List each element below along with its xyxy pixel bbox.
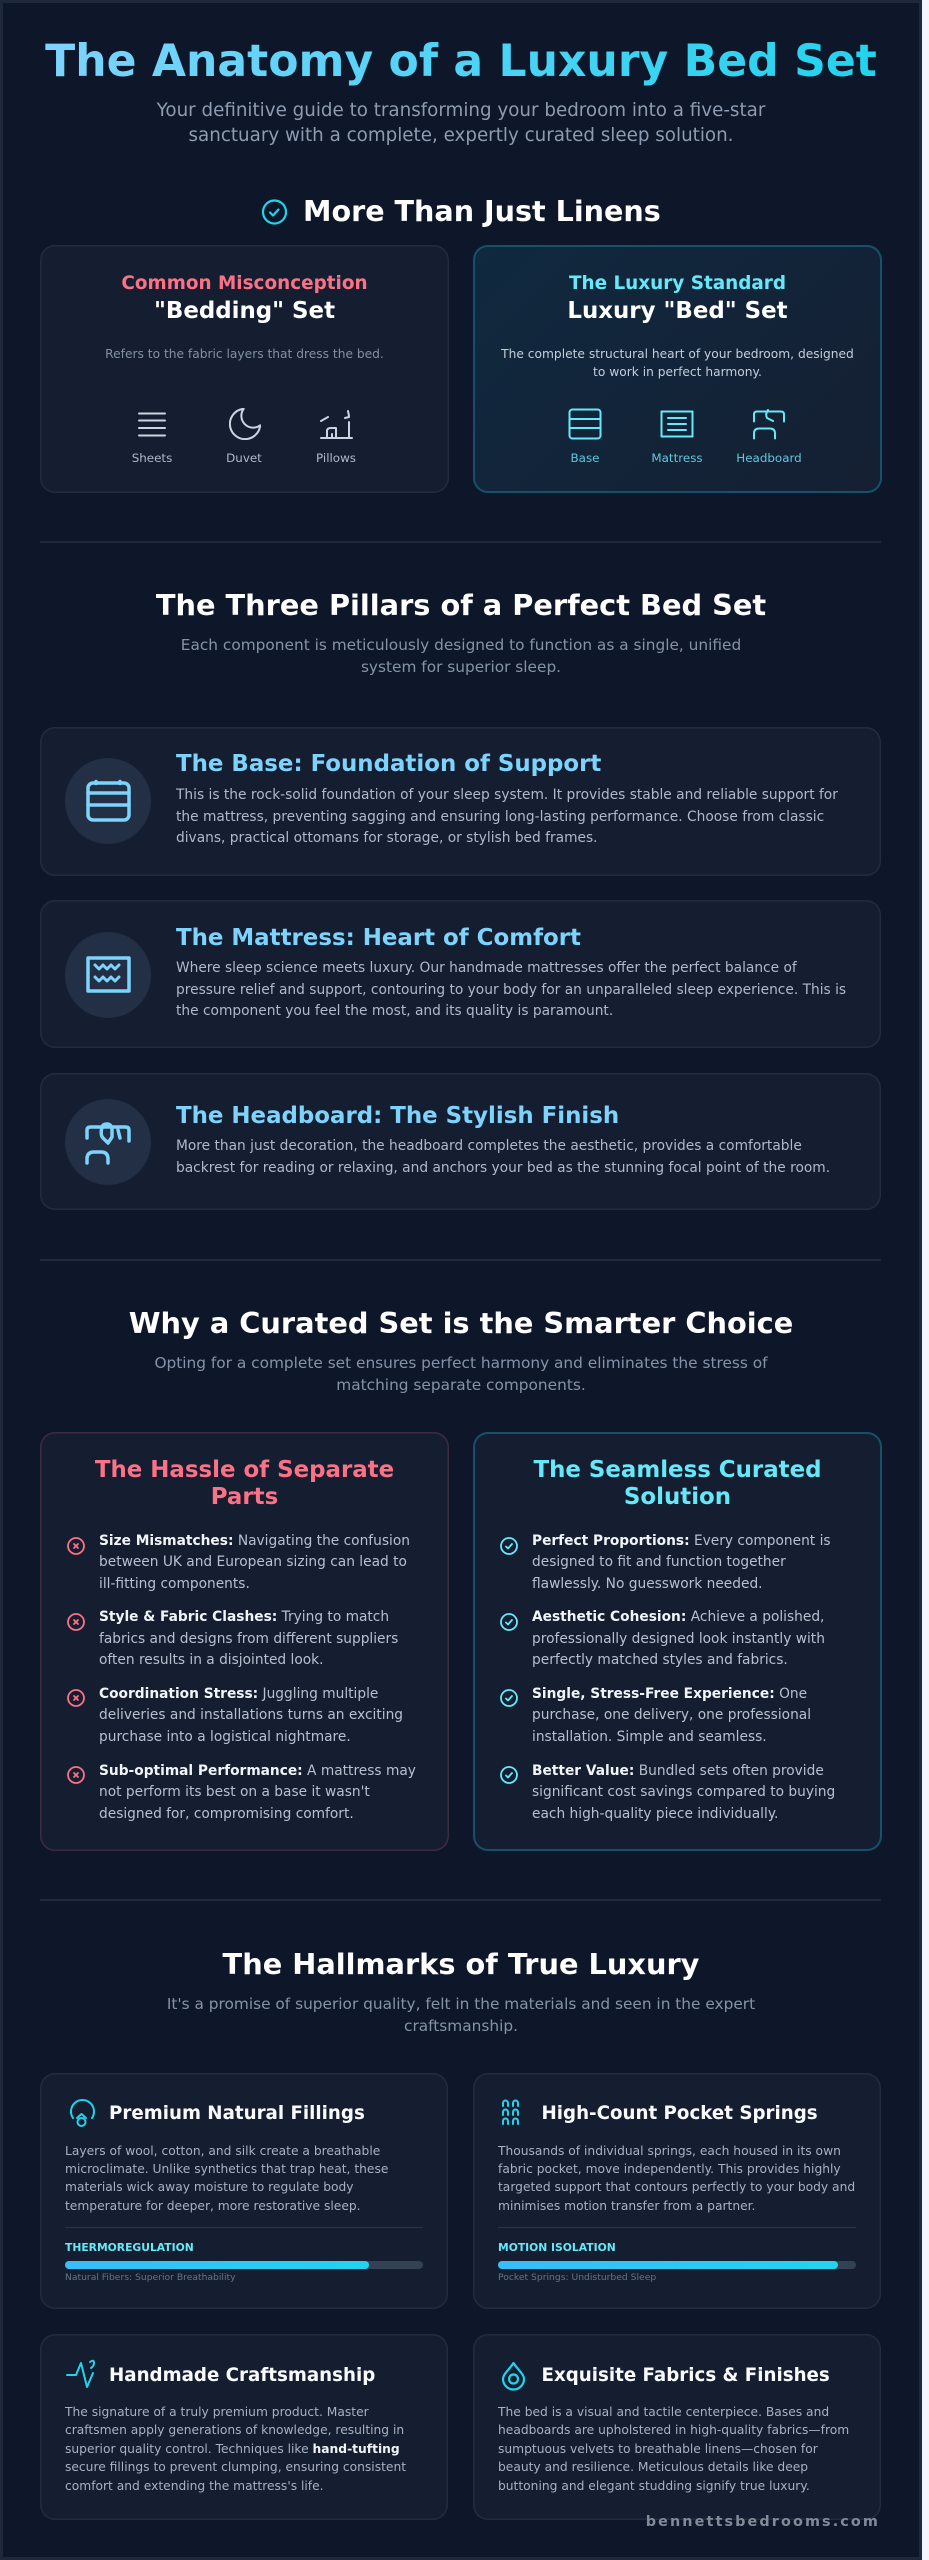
- metric caption: Pocket Springs: Undisturbed Sleep: [498, 2272, 656, 2283]
- problem: size mismatches: Size Mismatches: Navigating the confusion: [99, 1532, 410, 1548]
- benefit: cohesion: [532, 1609, 825, 1668]
- feature text: sumptuous velvets to breathable linens—chosen for: [498, 2442, 818, 2456]
- benefit: proportions: designed to fit and function together: [532, 1554, 786, 1570]
- pillar text: More than just decoration, the headboard completes the aesthetic, provides a comfortable: [176, 1138, 802, 1154]
- benefit: single experience: Single, Stress-Free Experience: One: [532, 1686, 807, 1702]
- benefit: single experience: purchase, one delivery, one professional: [532, 1707, 811, 1723]
- pillar text: the mattress, preventing sagging and ensuring long-lasting performance. Choose from classic: [176, 809, 824, 825]
- panel: natural fillings: [40, 2073, 448, 2309]
- benefit: proportions: Perfect Proportions: Every component is: [532, 1532, 831, 1548]
- problem: coordination stress: Coordination Stress: Juggling multiple: [99, 1686, 378, 1702]
- subtitle: sanctuary with a complete, expertly curated sleep solution.: [188, 125, 733, 146]
- pillar text: pressure relief and support, contouring to your body for an unparalleled sleep experience. This is: [176, 982, 846, 998]
- feature text: [498, 2403, 849, 2495]
- section intro: pillars: [181, 636, 741, 676]
- pillar text: divans, practical ottomans for storage, or stylish bed frames.: [176, 830, 598, 846]
- pillar text: [176, 1138, 830, 1176]
- icon: headboard: [753, 409, 785, 440]
- card description: Refers to the fabric layers that dress the bed.: [105, 346, 384, 360]
- feature text: headboards are upholstered in high-quality fabrics—from: [498, 2423, 849, 2437]
- problem: style clashes: Style & Fabric Clashes: Trying to match: [99, 1609, 389, 1625]
- feature text: buttoning and elegant studding signify true luxury.: [498, 2479, 810, 2493]
- label: headboard: Headboard: [736, 451, 802, 465]
- feature title: Handmade Craftsmanship: [109, 2364, 375, 2386]
- feature text: [64, 2405, 406, 2493]
- feature text: [498, 2144, 855, 2213]
- panel: the base: [40, 727, 881, 876]
- benefit: single experience: installation. Simple and seamless.: [532, 1729, 767, 1745]
- metric caption: Natural Fibers: Superior Breathability: [65, 2272, 236, 2283]
- card label: The Luxury Standard: [569, 272, 786, 294]
- problem: style clashes: fabrics and designs from different suppliers: [99, 1631, 398, 1647]
- section intro: pillars: system for superior sleep.: [361, 658, 561, 676]
- title: The Anatomy of a Luxury Bed Set: [45, 36, 877, 87]
- panel: the mattress: [40, 900, 881, 1048]
- feature text: The signature of a truly premium product. Master: [65, 2405, 369, 2419]
- panel title: Parts: [211, 1484, 278, 1510]
- panel title: [95, 1457, 394, 1510]
- feature title: High-Count Pocket Springs: [542, 2102, 818, 2124]
- label: mattress: Mattress: [651, 451, 703, 465]
- icon: check: [500, 1613, 518, 1631]
- problem: coordination stress: [99, 1686, 403, 1745]
- benefit: value: significant cost savings compared to buying: [532, 1784, 835, 1800]
- benefit: cohesion: Aesthetic Cohesion: Achieve a polished,: [532, 1609, 824, 1625]
- panel title: [534, 1457, 822, 1510]
- benefit: value: [532, 1763, 835, 1822]
- panel: seamless curated solution: [473, 1432, 882, 1851]
- problem: style clashes: [99, 1609, 398, 1668]
- icon: pillows: [320, 410, 353, 439]
- feature text: microclimate. Unlike synthetics that trap heat, these: [65, 2162, 388, 2176]
- label: base: Base: [571, 451, 599, 465]
- pillar title: The Headboard: The Stylish Finish: [176, 1103, 619, 1129]
- panel: luxury bed set: [473, 245, 882, 493]
- panel title: The Seamless Curated: [534, 1457, 822, 1483]
- feature title: Exquisite Fabrics & Finishes: [542, 2364, 830, 2386]
- benefit: single experience: [532, 1686, 811, 1745]
- problem: size mismatches: [99, 1532, 410, 1592]
- subtitle: Your definitive guide to transforming your bedroom into a five-star: [157, 100, 765, 121]
- panel: the headboard: [40, 1073, 881, 1210]
- problem: size mismatches: ill-fitting components.: [99, 1576, 250, 1592]
- feature text: secure fillings to prevent clumping, ensuring consistent: [65, 2460, 406, 2474]
- section intro: hallmarks: craftsmanship.: [404, 2016, 518, 2034]
- icon: mattress: [65, 932, 151, 1018]
- icon: pulse: [66, 2360, 95, 2388]
- problem: coordination stress: deliveries and installations turns an exciting: [99, 1707, 403, 1723]
- pillar text: Where sleep science meets luxury. Our handmade mattresses offer the perfect balance of: [176, 960, 797, 976]
- progress bar: [498, 2261, 856, 2269]
- label: pillows: Pillows: [316, 451, 356, 465]
- icon: cross: [67, 1689, 85, 1707]
- panel: hassle of separate parts: [40, 1432, 449, 1851]
- icon: headboard: [65, 1099, 151, 1185]
- heading: three pillars: The Three Pillars of a Perfect Bed Set: [156, 588, 766, 622]
- feature text: comfort and extending the mattress's life.: [65, 2479, 324, 2493]
- feature text: superior quality control. Techniques like hand-tufting: [65, 2442, 400, 2456]
- label: sheets: Sheets: [132, 451, 172, 465]
- feature title: Premium Natural Fillings: [109, 2102, 365, 2124]
- icon: cross: [67, 1766, 85, 1784]
- icon: fillings: [70, 2099, 95, 2127]
- feature text: Thousands of individual springs, each housed in its own: [498, 2144, 841, 2158]
- heading: more than just linens: More Than Just Linens: [303, 194, 661, 228]
- panel: handmade craftsmanship: [40, 2334, 448, 2520]
- pillar text: [176, 960, 846, 1019]
- benefit: cohesion: professionally designed look instantly with: [532, 1631, 825, 1647]
- feature text: [65, 2144, 388, 2213]
- label: duvet: Duvet: [226, 451, 262, 465]
- card title: Luxury "Bed" Set: [567, 298, 788, 324]
- subtitle: [156, 100, 766, 146]
- feature text: The bed is a visual and tactile centerpiece. Bases and: [498, 2405, 829, 2419]
- feature text: fabric pocket, move independently. This provides highly: [498, 2162, 841, 2176]
- section intro: pillars: Each component is meticulously designed to function as a single, unified: [181, 636, 741, 654]
- benefit: proportions: [532, 1532, 831, 1592]
- feature text: beauty and resilience. Meticulous details like deep: [498, 2460, 808, 2474]
- problem: performance: designed for, compromising comfort.: [99, 1806, 354, 1822]
- feature text: craftsmen apply generations of knowledge, resulting in: [65, 2423, 404, 2437]
- card label: Common Misconception: [121, 272, 368, 294]
- panel: pocket springs: [473, 2073, 881, 2309]
- pillar text: backrest for reading or relaxing, and anchors your bed as the stunning focal point of the room.: [176, 1160, 830, 1176]
- heading: curated set: Why a Curated Set is the Smarter Choice: [129, 1306, 793, 1340]
- feature text: targeted support that contours perfectly to your body and: [498, 2180, 855, 2194]
- pillar text: the component you feel the most, and its quality is paramount.: [176, 1003, 613, 1019]
- icon: base: [568, 408, 602, 440]
- card description: to work in perfect harmony.: [593, 365, 762, 379]
- icon: base: [65, 758, 151, 844]
- metric label: MOTION ISOLATION: [498, 2240, 616, 2254]
- heading: hallmarks: The Hallmarks of True Luxury: [223, 1947, 699, 1981]
- feature text: materials wick away moisture to regulate body: [65, 2180, 354, 2194]
- icon: cross: [67, 1537, 85, 1555]
- section intro: curated: matching separate components.: [336, 1376, 586, 1394]
- icon: check: [500, 1537, 518, 1555]
- problem: performance: not perform its best on a base it wasn't: [99, 1784, 370, 1800]
- icon: check: [500, 1689, 518, 1707]
- icon: check: [500, 1766, 518, 1784]
- icon: mattress: [660, 410, 694, 438]
- feature text: temperature for deeper, more restorative sleep.: [65, 2199, 361, 2213]
- icon: check circle: [262, 199, 287, 225]
- benefit: proportions: flawlessly. No guesswork needed.: [532, 1576, 763, 1592]
- card title: "Bedding" Set: [154, 298, 335, 324]
- pillar title: The Base: Foundation of Support: [176, 751, 601, 777]
- card description: The complete structural heart of your bedroom, designed: [501, 346, 854, 360]
- watermark: bennettsbedrooms.com: [646, 2514, 880, 2530]
- section intro: curated: Opting for a complete set ensures perfect harmony and eliminates the stress of: [154, 1354, 768, 1372]
- section intro: curated: [154, 1354, 768, 1394]
- feature text: Layers of wool, cotton, and silk create a breathable: [65, 2144, 380, 2158]
- pillar title: The Mattress: Heart of Comfort: [176, 925, 581, 951]
- problem: performance: Sub-optimal Performance: A mattress may: [99, 1763, 416, 1779]
- feature text: minimises motion transfer from a partner.: [498, 2199, 755, 2213]
- icon: cross: [67, 1613, 85, 1631]
- problem: style clashes: often results in a disjointed look.: [99, 1652, 324, 1668]
- panel: bedding set: [40, 245, 449, 493]
- benefit: value: each high-quality piece individually.: [532, 1806, 778, 1822]
- section intro: hallmarks: [167, 1995, 755, 2034]
- benefit: cohesion: perfectly matched styles and fabrics.: [532, 1652, 788, 1668]
- panel title: The Hassle of Separate: [95, 1457, 394, 1483]
- panel title: Solution: [624, 1484, 731, 1510]
- metric label: THERMOREGULATION: [65, 2240, 194, 2254]
- problem: coordination stress: purchase into a logistical nightmare.: [99, 1729, 351, 1745]
- icon: fabric drop: [500, 2360, 527, 2391]
- pillar text: [176, 787, 838, 846]
- panel: exquisite fabrics: [473, 2334, 881, 2520]
- card description: [501, 346, 854, 379]
- benefit: value: Better Value: Bundled sets often provide: [532, 1763, 824, 1779]
- icon: duvet: [229, 408, 261, 440]
- pillar text: This is the rock-solid foundation of your sleep system. It provides stable and reliable support for: [176, 787, 838, 803]
- section intro: hallmarks: It's a promise of superior quality, felt in the materials and seen in the expert: [167, 1995, 755, 2013]
- progress bar: [65, 2261, 423, 2269]
- problem: performance: [99, 1763, 416, 1822]
- icon: springs: [502, 2100, 519, 2125]
- icon: sheets: [138, 412, 166, 436]
- problem: size mismatches: between UK and European sizing can lead to: [99, 1554, 407, 1570]
